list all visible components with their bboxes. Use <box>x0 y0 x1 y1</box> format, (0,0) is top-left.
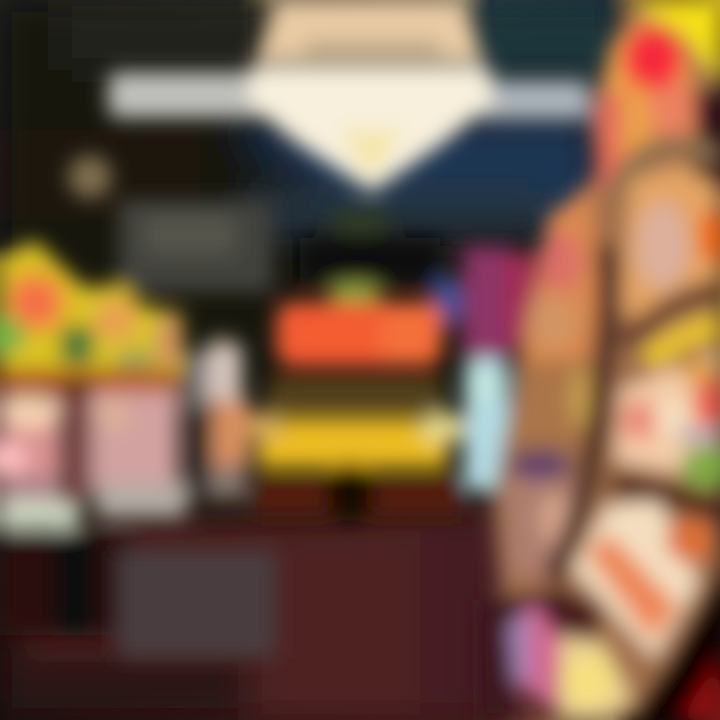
light bar right <box>478 80 590 120</box>
grey wall sign <box>118 200 273 292</box>
right machines: horizontal frame <box>612 484 720 512</box>
ceiling spot light <box>68 155 112 199</box>
right machines: top orange and red panel <box>592 15 695 195</box>
right machines: maroon gap <box>696 90 720 178</box>
right slot machines <box>480 0 720 720</box>
right machines: bottom stripe panel <box>572 500 714 658</box>
green haze above centre <box>330 210 390 234</box>
left machines: pink screens <box>0 392 186 530</box>
right machines: vertical frame <box>552 245 609 580</box>
right machines: mid-left screen <box>505 188 598 580</box>
floor reflection patch <box>118 550 276 658</box>
light bar left <box>108 72 263 118</box>
magenta wall panel <box>462 246 535 358</box>
centre orange sign <box>276 282 442 366</box>
blue-white pillar <box>464 358 508 492</box>
chandelier <box>250 0 492 192</box>
right machines: yellow arch <box>648 326 720 362</box>
right machines: lower joint <box>556 585 604 650</box>
right machines: dark aisle edge <box>480 590 570 720</box>
centre machines: bases <box>252 462 462 522</box>
left machines: dark bases <box>0 532 135 635</box>
centre machines: yellow row <box>248 412 464 468</box>
right machines: dark corner <box>628 570 720 720</box>
right machines: bottom pink and yellow screens <box>508 602 632 720</box>
right machines: arch <box>610 143 720 195</box>
right machines: dark arc <box>625 288 720 345</box>
left machines: orange band <box>0 368 178 410</box>
blue accent by pillar <box>429 276 463 328</box>
standing figure <box>182 352 212 502</box>
centre machines: dark band <box>268 378 443 412</box>
right machines: yellow top sign <box>632 0 720 80</box>
right machines: lower screen <box>616 350 720 488</box>
right machines: upper screen <box>622 165 720 325</box>
black back wall <box>300 238 440 282</box>
left slot machines <box>0 240 186 635</box>
right machines: base tone <box>492 0 720 720</box>
left machines: yellow toppers <box>0 240 184 380</box>
mid machine by aisle <box>206 336 250 499</box>
